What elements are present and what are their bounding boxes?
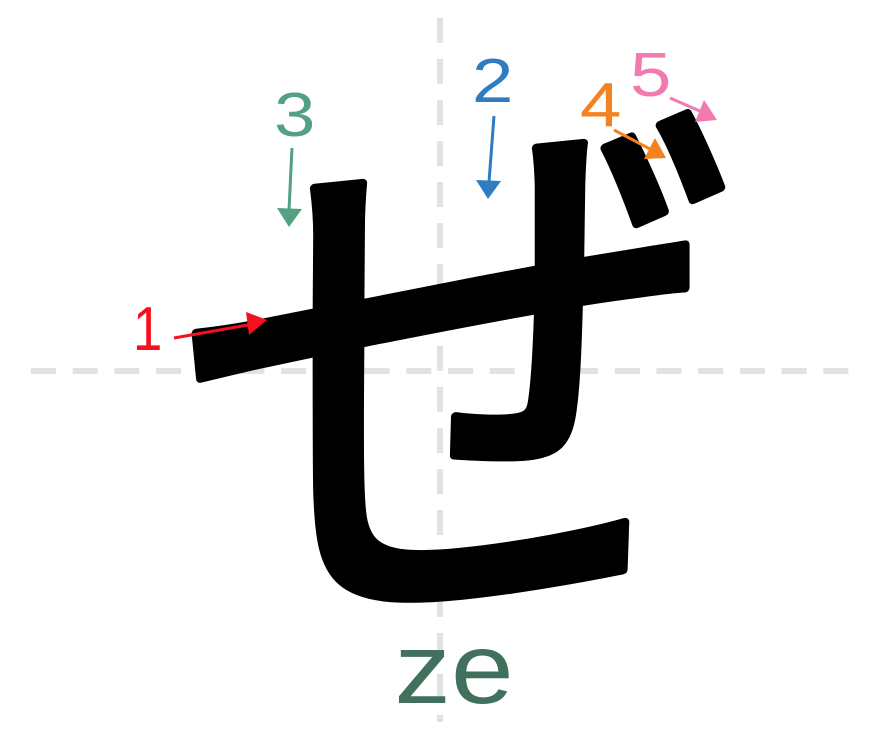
stroke 5 number and arrow: 5 <box>630 40 671 110</box>
kana character ze: ぜ <box>182 46 739 724</box>
stroke 5 number and arrow <box>630 40 717 122</box>
stroke 1 number and arrow <box>133 295 267 364</box>
stroke 1 number and arrow: 1 <box>133 295 162 364</box>
stroke 4 number and arrow <box>580 70 666 159</box>
stroke 4 number and arrow: 4 <box>580 70 621 140</box>
stroke 2 number and arrow <box>472 46 513 199</box>
romaji label: ze <box>394 612 514 725</box>
stroke 3 number and arrow: 3 <box>274 80 315 150</box>
stroke 2 number and arrow: 2 <box>472 46 513 116</box>
stroke 3 number and arrow <box>274 80 315 227</box>
